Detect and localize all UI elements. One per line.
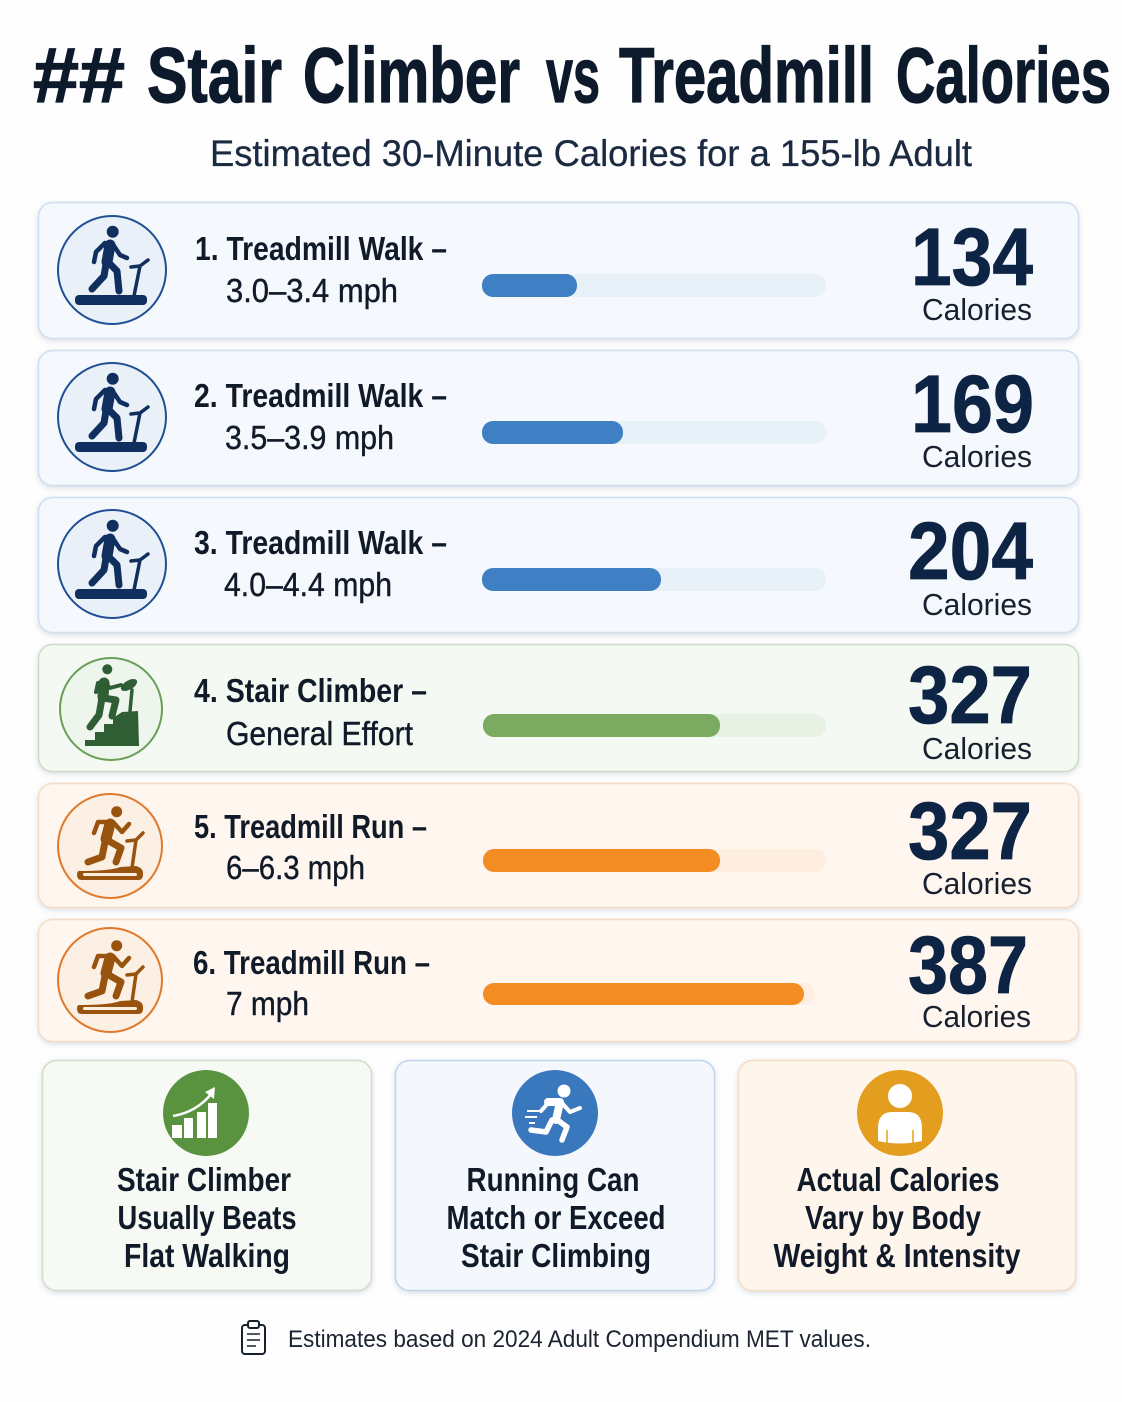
calorie value: 204: [908, 506, 1033, 597]
row label: 6. Treadmill Run –: [193, 944, 430, 981]
panel: row 1 treadmill walk 3.0-3.4 mph: [38, 202, 1078, 338]
title: Treadmill: [619, 31, 874, 119]
row label: [195, 230, 447, 309]
panel: row 5 treadmill run 6-6.3 mph: [38, 784, 1078, 908]
takeaway text: [446, 1161, 666, 1274]
calorie value: 387: [908, 920, 1028, 1011]
takeaway text: Usually Beats: [118, 1199, 296, 1236]
row label: 4.0–4.4 mph: [224, 566, 392, 603]
row label: 1. Treadmill Walk –: [195, 230, 447, 267]
panel: row 6 treadmill run 7 mph: [38, 920, 1078, 1042]
panel: body weight takeaway: [738, 1060, 1076, 1290]
panel: running takeaway: [396, 1060, 714, 1290]
row label: [193, 944, 430, 1022]
panel: row 2 treadmill walk 3.5-3.9 mph: [38, 350, 1078, 486]
calorie value: Calories: [922, 731, 1032, 766]
icon: person: [857, 1070, 943, 1156]
progress bar: [483, 714, 826, 737]
takeaway text: Weight & Intensity: [774, 1237, 1021, 1274]
takeaway text: Stair Climbing: [461, 1237, 651, 1274]
takeaway text: Running Can: [466, 1161, 640, 1198]
row label: [194, 808, 427, 886]
takeaway text: Flat Walking: [124, 1237, 290, 1274]
title: Stair: [147, 31, 282, 119]
row label: 6–6.3 mph: [226, 849, 365, 886]
icon: treadmill walker: [58, 216, 166, 324]
row label: 2. Treadmill Walk –: [194, 377, 447, 414]
takeaway text: Stair Climber: [117, 1161, 291, 1198]
calorie value: 327: [908, 650, 1032, 741]
calorie value: Calories: [922, 999, 1031, 1034]
title: vs: [546, 31, 600, 119]
icon: runner: [512, 1070, 598, 1156]
icon: treadmill runner: [58, 928, 162, 1032]
icon: rising bar chart: [163, 1070, 249, 1156]
takeaway text: Match or Exceed: [446, 1199, 666, 1236]
row label: 3.0–3.4 mph: [226, 272, 398, 309]
calorie value: Calories: [922, 587, 1032, 622]
icon: treadmill walker: [58, 510, 166, 618]
progress bar: [483, 983, 815, 1005]
calorie value: Calories: [922, 292, 1032, 327]
row label: General Effort: [226, 715, 413, 752]
icon: treadmill walker: [58, 363, 166, 471]
calorie value: 134: [911, 212, 1033, 303]
takeaway text: [117, 1161, 296, 1274]
panel: row 3 treadmill walk 4.0-4.4 mph: [38, 498, 1078, 632]
icon: stair climber: [60, 658, 162, 760]
row label: 3. Treadmill Walk –: [194, 524, 447, 561]
title: Climber: [303, 31, 520, 119]
row label: [194, 672, 427, 752]
progress bar: [482, 274, 826, 297]
icon: clipboard: [242, 1321, 265, 1354]
progress bar: [482, 568, 826, 591]
row label: 4. Stair Climber –: [194, 672, 427, 709]
panel: stair climber takeaway: [42, 1060, 372, 1290]
calorie value: 327: [908, 786, 1032, 877]
progress bar: [483, 849, 826, 872]
calorie value: Calories: [922, 866, 1032, 901]
row label: 5. Treadmill Run –: [194, 808, 427, 845]
progress bar: [482, 421, 826, 444]
calorie value: Calories: [922, 439, 1032, 474]
takeaway text: [774, 1161, 1021, 1274]
footnote: Estimates based on 2024 Adult Compendium MET values.: [288, 1326, 871, 1353]
row label: 7 mph: [226, 985, 309, 1022]
panel: row 4 stair climber: [38, 644, 1078, 772]
title: ##: [33, 31, 125, 119]
takeaway text: Actual Calories: [796, 1161, 1000, 1198]
row label: 3.5–3.9 mph: [225, 419, 394, 456]
row label: [194, 377, 447, 456]
title: [33, 31, 1111, 119]
takeaway text: Vary by Body: [805, 1199, 982, 1236]
calorie value: 169: [911, 359, 1034, 450]
subtitle: Estimated 30-Minute Calories for a 155-lb Adult: [210, 133, 973, 174]
row label: [194, 524, 447, 603]
icon: treadmill runner: [58, 794, 162, 898]
